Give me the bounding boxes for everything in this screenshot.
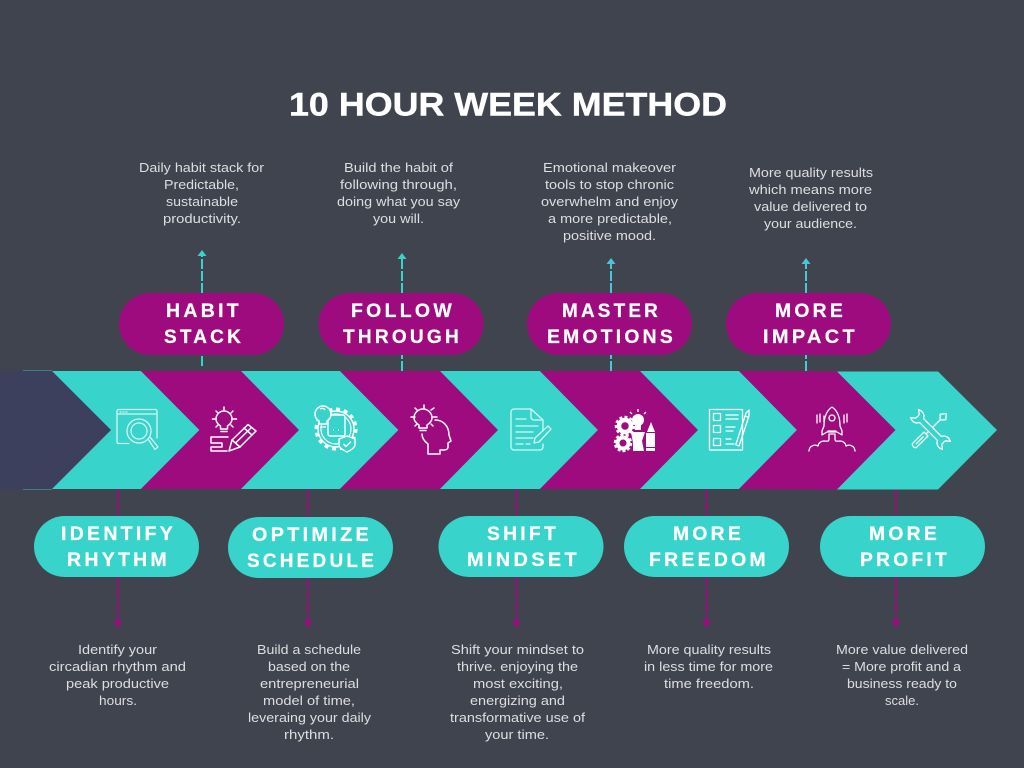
pill: more freedom: MORE <box>673 524 744 545</box>
pill: identify rhythm: IDENTIFY <box>61 524 176 545</box>
pill: follow through <box>318 293 484 355</box>
pill: master emotions: MASTER <box>562 301 661 322</box>
text: more freedom description: in less time for more <box>644 659 773 674</box>
text: identify rhythm description: circadian rhythm and <box>49 659 186 674</box>
connectors: downward dashed purple arrows <box>114 489 900 628</box>
text: master emotions description: a more predictable, <box>548 211 672 226</box>
text: shift mindset description: energizing and <box>470 693 565 708</box>
text: more profit description <box>836 642 968 708</box>
pill: more profit: PROFIT <box>860 550 950 571</box>
pill: more freedom <box>624 516 789 577</box>
icon: checklist and pen <box>710 410 749 450</box>
text: more profit description: = More profit and a <box>842 659 962 674</box>
text: habit stack description: Predictable, <box>164 177 239 192</box>
text: master emotions description: positive mood. <box>563 228 656 243</box>
text: shift mindset description: thrive. enjoying the <box>457 659 578 674</box>
text: habit stack description: Daily habit stack for <box>139 160 265 175</box>
text: master emotions description: Emotional makeover <box>543 160 677 175</box>
pill: habit stack: STACK <box>164 327 244 348</box>
connectors: upward dashed teal arrows <box>198 250 810 371</box>
pill: master emotions: EMOTIONS <box>547 327 676 348</box>
icon: head with bulb <box>411 405 451 454</box>
text: more impact description: which means more <box>748 182 872 197</box>
text: more profit description: business ready to <box>847 676 957 691</box>
text: more impact description <box>748 165 874 231</box>
icon: gear with bulb and shield <box>315 406 356 452</box>
text: identify rhythm description <box>49 642 186 708</box>
text: optimize schedule description: leveraing your daily <box>248 710 372 725</box>
text: follow through description: you will. <box>373 211 424 226</box>
text: optimize schedule description: model of time, <box>263 693 355 708</box>
text: master emotions description: overwhelm and enjoy <box>541 194 679 209</box>
title: 10 HOUR WEEK METHOD <box>289 86 727 122</box>
pill: habit stack <box>119 293 284 355</box>
icon: crossed wrench and screwdriver <box>910 409 951 450</box>
pill: more impact <box>726 293 891 355</box>
text: habit stack description <box>139 160 265 226</box>
icon: bulb and pencil <box>211 407 256 451</box>
pill: more profit: MORE <box>869 524 940 545</box>
pill: identify rhythm: RHYTHM <box>67 550 170 571</box>
pill: shift mindset <box>438 516 604 577</box>
pill: more profit <box>820 516 985 577</box>
text: shift mindset description: transformative use of <box>450 710 585 725</box>
pill: optimize schedule: OPTIMIZE <box>252 525 372 546</box>
text: more profit description: scale. <box>885 693 919 708</box>
icon: search window <box>117 410 158 450</box>
pill: more freedom: FREEDOM <box>649 550 769 571</box>
pill: more impact: MORE <box>775 301 846 322</box>
icon: gears, bulb and pencil (filled) <box>615 409 655 451</box>
text: optimize schedule description <box>248 642 372 742</box>
text: more impact description: value delivered to <box>754 199 867 214</box>
text: more impact description: More quality results <box>749 165 874 180</box>
text: habit stack description: sustainable <box>166 194 238 209</box>
pill: shift mindset: MINDSET <box>467 550 580 571</box>
pill: follow through: FOLLOW <box>351 301 455 322</box>
pill: habit stack: HABIT <box>166 301 242 322</box>
icon: rocket launch <box>809 407 855 451</box>
text: master emotions description <box>541 160 679 243</box>
text: more freedom description <box>644 642 773 691</box>
text: optimize schedule description: entrepreneurial <box>260 676 359 691</box>
text: follow through description: following through, <box>340 177 457 192</box>
pill: identify rhythm <box>34 516 199 577</box>
text: shift mindset description: Shift your mindset to <box>451 642 584 657</box>
pill: optimize schedule: SCHEDULE <box>247 551 377 572</box>
pill: shift mindset: SHIFT <box>487 524 559 545</box>
text: more freedom description: More quality results <box>647 642 772 657</box>
text: optimize schedule description: rhythm. <box>284 727 334 742</box>
text: shift mindset description: your time. <box>485 727 549 742</box>
text: identify rhythm description: hours. <box>99 693 137 708</box>
text: identify rhythm description: peak productive <box>66 676 169 691</box>
text: shift mindset description <box>450 642 585 742</box>
pill: follow through: THROUGH <box>343 327 462 348</box>
icon: document and pencil <box>511 409 551 450</box>
text: more freedom description: time freedom. <box>664 676 754 691</box>
text: master emotions description: tools to stop chronic <box>545 177 675 192</box>
text: habit stack description: productivity. <box>163 211 241 226</box>
chevron band <box>0 370 997 490</box>
text: follow through description <box>337 160 461 226</box>
text: more impact description: your audience. <box>764 216 857 231</box>
text: optimize schedule description: based on the <box>268 659 350 674</box>
pill: master emotions <box>527 293 692 355</box>
text: optimize schedule description: Build a schedule <box>257 642 361 657</box>
text: shift mindset description: most exciting, <box>473 676 563 691</box>
pill: more impact: IMPACT <box>763 327 858 348</box>
text: follow through description: doing what you say <box>337 194 461 209</box>
text: more profit description: More value delivered <box>836 642 968 657</box>
pill: optimize schedule <box>228 517 393 578</box>
text: follow through description: Build the habit of <box>344 160 453 175</box>
text: identify rhythm description: Identify your <box>78 642 158 657</box>
